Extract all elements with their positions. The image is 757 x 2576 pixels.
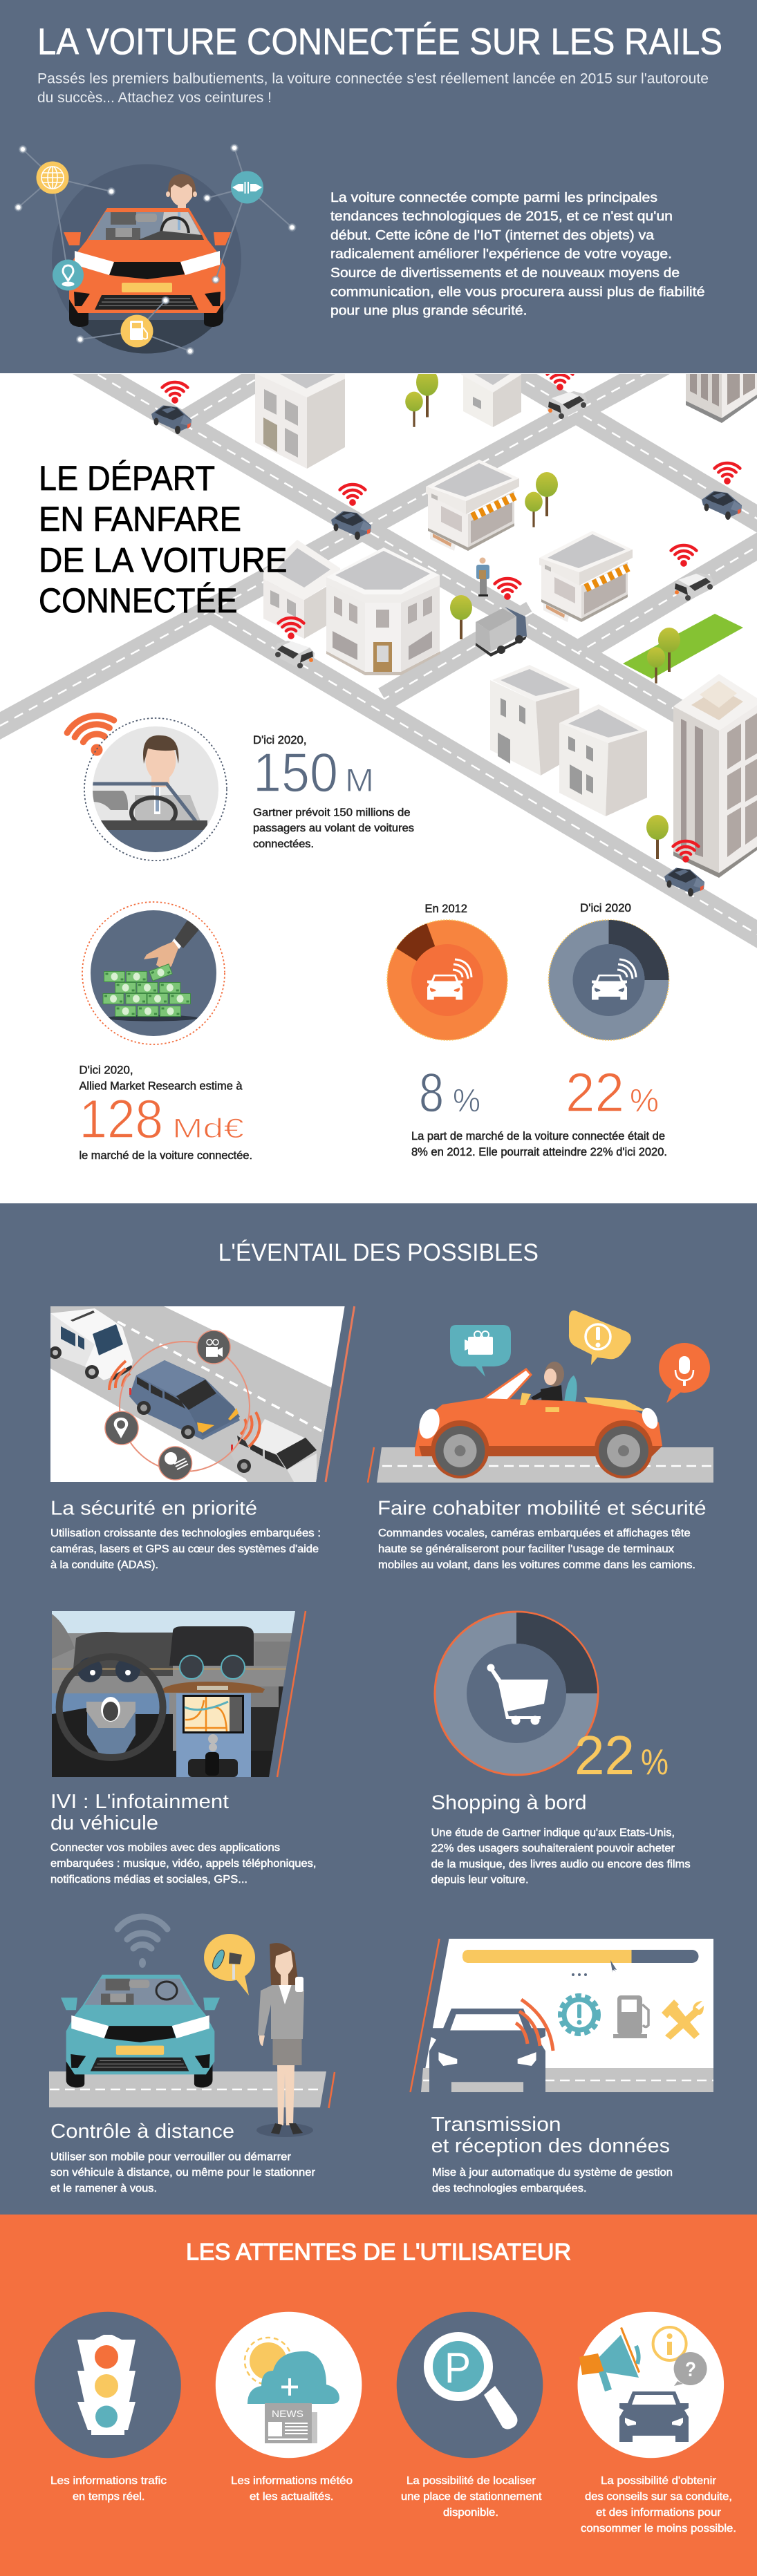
lawn [623,614,743,679]
chart: shopping 22%: % [641,1742,669,1783]
roads [0,358,757,952]
chart: market share 2020: D'ici 2020 [580,902,631,914]
stat: 8% and 22%: La part de marché de la voiture connectée était de [411,1130,665,1143]
gray van [230,1419,317,1482]
text: transmission: Mise à jour automatique du système de gestion [432,2167,673,2179]
caption: traffic: Les informations trafic [50,2475,167,2487]
icon: location pin [53,260,84,290]
text: contrôle à distance: et le ramener à vous. [50,2183,157,2194]
illustration: driver in circle [84,718,227,861]
icon: fuel pump [120,315,153,347]
text: faire cohabiter: Commandes vocales, caméras embarquées et affichages tête [378,1527,691,1539]
text: IVI: Connecter vos mobiles avec des applications [50,1842,280,1854]
caption: driving advice: consommer le moins possible. [581,2523,736,2535]
stat: 128 Md€: D'ici 2020, [79,1064,133,1076]
stat: 150 M: connectées. [253,838,314,850]
icon: parking magnifier: P [445,2344,471,2392]
caption: driving advice: La possibilité d'obtenir [601,2475,717,2487]
instrument cluster [77,1657,140,1682]
building: tower lower right [673,674,757,878]
icon: weather and news [216,2312,362,2458]
icon: globe [36,162,69,194]
icon: parking magnifier [397,2312,543,2458]
intro text block: Source de divertissements et de nouveaux moyens de [330,265,680,281]
icon: plug [231,171,263,203]
text: faire cohabiter [377,1498,707,1571]
chart: market share 2012: En 2012 [424,903,467,915]
driver [531,1362,577,1405]
text: la sécurité en priorité: à la conduite (ADAS). [50,1559,158,1571]
caption: traffic [50,2475,167,2503]
intro text block: communication, elle vous procurera aussi plus de fiabilité [330,284,705,299]
heading: l'éventail des possibles: L'ÉVENTAIL DES POSSIBLES [218,1239,539,1266]
text: shopping: Shopping à bord [431,1792,587,1814]
sensor icon: pin [105,1411,138,1445]
chart: shopping 22%: 22 [574,1724,635,1786]
panel: city map background [0,373,757,1203]
stat: 128 Md€: Md€ [172,1113,244,1144]
speech bubble: microphone [659,1343,710,1403]
bubble: keys [204,1934,255,1995]
illustration: dashboard [52,1611,306,1777]
icon: cart [487,1664,548,1725]
building: tall house top [255,366,345,469]
subtitle [37,70,709,106]
illustration: convertible on road [368,1310,713,1483]
dark car [429,2009,545,2092]
text: transmission: Transmission [431,2114,561,2136]
building: lower right block [559,704,647,816]
caption: driving advice: des conseils sur sa conduite, [585,2491,732,2503]
progress bar [462,1950,698,1976]
network dots [15,145,295,354]
text: transmission: des technologies embarquées. [432,2183,586,2194]
icon: gear alert [561,1997,597,2033]
stat: 150 M: M [345,762,374,798]
intro text block: La voiture connectée compte parmi les principales [330,190,657,205]
building: small cube top [461,374,521,427]
wheels [431,1420,653,1478]
text: la sécurité en priorité: caméras, lasers et GPS au cœur des systèmes d'aide [50,1543,319,1555]
text: contrôle à distance: Utiliser son mobile pour verrouiller ou démarrer [50,2152,292,2163]
woman with phone [256,1943,313,2137]
text: contrôle à distance [50,2121,316,2194]
person [476,557,489,596]
driver [166,174,197,209]
driver in windshield [138,212,204,240]
text: la sécurité en priorité: Utilisation croissante des technologies embarquées : [50,1527,321,1539]
icon: megaphone, info, help, car [578,2312,724,2458]
white van [49,1308,133,1381]
illustration: safety scene [49,1306,355,1482]
network lines [18,148,292,351]
heading: les attentes: LES ATTENTES DE L'UTILISATEUR [186,2239,571,2266]
intro text block: pour une plus grande sécurité. [330,303,527,319]
wood strip [162,1682,265,1693]
center stack [176,1693,251,1777]
heading: le départ en fanfare: LE DÉPART [39,459,215,498]
text: IVI [50,1791,316,1886]
text: la sécurité en priorité: La sécurité en priorité [50,1498,257,1520]
icon: traffic light [35,2312,181,2458]
stat: 128 Md€: le marché de la voiture connectée. [79,1149,252,1162]
text: shopping: Une étude de Gartner indique qu'aux Etats-Unis, [431,1827,675,1839]
chart: market share 2020 [549,902,669,1040]
icon: orange wifi [64,711,121,759]
caption: parking: une place de stationnement [401,2491,542,2503]
icon: weather and news: NEWS [272,2408,303,2419]
text: la sécurité en priorité [50,1498,321,1571]
stat: 150 M: D'ici 2020, [253,734,307,746]
illustration: remote control [49,1917,335,2137]
icon: tools [662,2000,704,2040]
text: transmission: et réception des données [431,2135,670,2157]
illustration: data transmission [411,1939,713,2092]
speech bubble: alert [569,1310,631,1365]
icon: megaphone, info, help, car: ? [685,2358,696,2381]
caption: weather: Les informations météo [231,2475,353,2487]
text: IVI: du véhicule [50,1812,158,1834]
text: shopping: depuis leur voiture. [431,1874,529,1886]
sensor ring [120,1342,250,1472]
trees [405,368,680,859]
heading: le départ en fanfare: DE LA VOITURE [39,540,288,579]
caption: parking: disponible. [443,2507,498,2519]
intro text block: radicalement améliorer l'expérience de votre voyage. [330,247,672,262]
connected cars [151,391,742,896]
subtitle: Passés les premiers balbutiements, la voiture connectée s'est réellement lancée en 2015 sur l'autoroute [37,70,709,87]
city map illustration [0,358,757,952]
text: contrôle à distance: Contrôle à distance [50,2121,234,2143]
sensor icon: headlight [159,1447,192,1480]
stat: 128 Md€: 128 [79,1088,163,1149]
stat: 128 Md€ [79,1064,252,1162]
text: faire cohabiter: mobiles au volant, dans les voitures comme dans les camions. [378,1559,695,1571]
building: tower top right [686,374,757,423]
illustration: money circle [82,902,225,1044]
stat: 8% and 22%: 22 [566,1062,624,1123]
heading: le départ en fanfare [39,459,288,620]
chart: shopping 22% [435,1612,669,1786]
illustration: connected car with IoT nodes [15,145,295,361]
shop 2 [539,531,633,622]
caption: parking: La possibilité de localiser [406,2475,536,2487]
building: corner house [326,547,440,675]
speech bubble: camera [450,1325,511,1377]
panel: header background [0,0,757,373]
caption: driving advice: et des informations pour [596,2507,722,2519]
intro text block: tendances technologiques de 2015, et ce n'est qu'un [330,209,673,224]
text: faire cohabiter: haute se généraliseront pour faciliter l'usage de terminaux [378,1543,674,1555]
stat: 8% and 22%: 8 [419,1062,444,1123]
caption: driving advice [581,2475,736,2535]
truck [476,607,527,657]
chart: market share 2012 [387,903,507,1040]
signal arcs [516,2000,553,2051]
stat: 150 M: passagers au volant de voitures [253,822,414,834]
car body [415,1398,662,1456]
panel: user expectations background [0,2215,757,2576]
road dashes [0,358,757,952]
text: faire cohabiter: Faire cohabiter mobilité et sécurité [377,1498,707,1520]
air vents [180,1655,245,1679]
stat: 150 M: 150 [253,742,338,803]
stat: 8% and 22%: % [630,1082,659,1118]
text: IVI: notifications médias et sociales, GPS... [50,1874,247,1886]
heading: le départ en fanfare: EN FANFARE [39,500,241,538]
sensor arcs [109,1361,260,1447]
panel: possibilities background [0,1203,757,2215]
caption: weather [231,2475,353,2503]
intro text block: début. Cette icône de l'IoT (internet des objets) va [330,227,654,243]
intro text block [330,190,705,319]
building: lower left block [490,665,579,775]
windshield [483,1369,531,1401]
text: transmission [431,2114,673,2194]
teal car [61,1975,220,2087]
caption: parking [401,2475,542,2519]
sensor icon: camera [197,1331,230,1364]
stat: 8% and 22%: 8% en 2012. Elle pourrait atteindre 22% d'ici 2020. [411,1146,667,1158]
stat: 150 M [253,734,414,850]
text: shopping: 22% des usagers souhaiteraient pouvoir acheter [431,1843,675,1854]
text: IVI: IVI : L'infotainment [50,1791,229,1813]
caption: weather: et les actualités. [250,2491,333,2503]
heading: le départ en fanfare: CONNECTÉE [39,581,238,620]
stat: 8% and 22%: % [453,1082,480,1118]
red wifi signals [162,369,740,861]
text: IVI: embarquées : musique, vidéo, appels téléphoniques, [50,1858,316,1870]
caption: traffic: en temps réel. [73,2491,145,2503]
blue van [129,1360,240,1440]
subtitle: du succès... Attachez vos ceintures ! [37,89,272,106]
shop 1 [426,460,519,551]
stat: 128 Md€: Allied Market Research estime à [79,1080,243,1093]
building: house behind title [263,540,340,639]
text: contrôle à distance: son véhicule à distance, ou même pour le stationner [50,2167,316,2179]
steering wheel [59,1657,163,1759]
text: shopping [431,1792,691,1886]
stat: 8% and 22% [411,1062,667,1158]
wifi signal [118,1917,167,1968]
text: shopping: de la musique, des livres audio ou encore des films [431,1859,691,1870]
car front [64,208,231,327]
stat: 150 M: Gartner prévoit 150 millions de [253,807,411,819]
icon: fuel pump [613,1995,648,2038]
